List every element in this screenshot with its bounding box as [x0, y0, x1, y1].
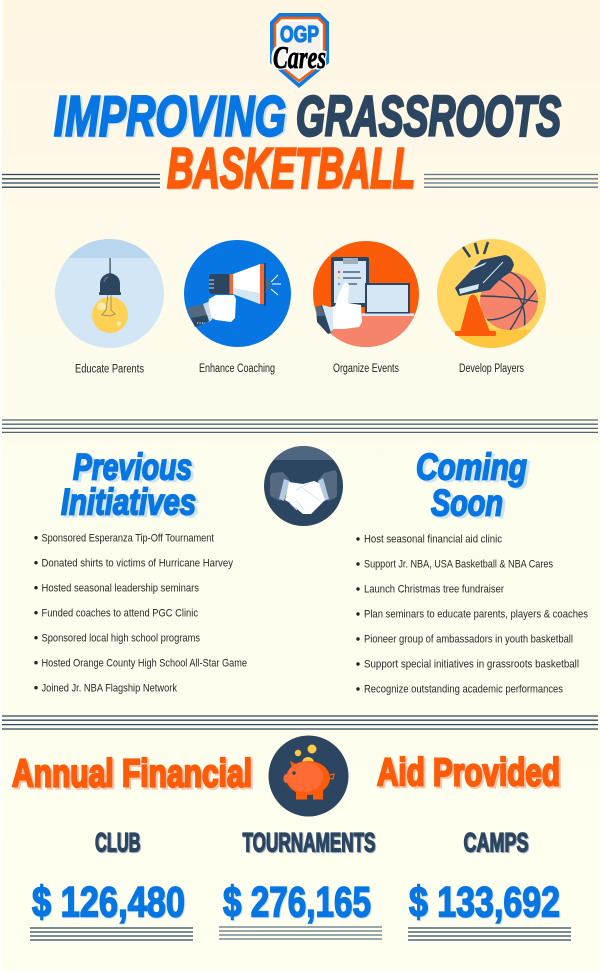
label: Enhance Coaching: Enhance Coaching: [199, 363, 275, 375]
title: Basketball: BASKETBALL: [167, 136, 415, 200]
heading: Previous Initiatives: Previous: [73, 446, 192, 488]
icon: light bulb: [55, 239, 164, 348]
icon: whistle, cone and basketball: [435, 239, 550, 350]
heading: Previous Initiatives: [61, 446, 196, 522]
icon: piggy bank: [268, 736, 348, 816]
stat: club: [32, 828, 185, 926]
heading: Coming Soon: Soon: [431, 482, 503, 524]
list: coming soon: Support special initiatives in grassroots basketball: [364, 658, 579, 670]
icon: megaphone: [184, 240, 291, 347]
list: previous initiatives: Hosted seasonal leadership seminars: [42, 582, 199, 594]
title: Improving Grassroots: IMPROVING: [54, 84, 286, 148]
logo: OGP Cares shield: [270, 13, 329, 88]
panel: goals: [50, 235, 550, 376]
logo: OGP Cares shield: OGP: [280, 21, 319, 47]
list: previous initiatives: Joined Jr. NBA Flagship Network: [42, 682, 177, 694]
list: previous initiatives: Sponsored local high school programs: [42, 632, 200, 644]
list: previous initiatives: Donated shirts to victims of Hurricane Harvey: [42, 558, 233, 570]
title: Improving Grassroots: [54, 84, 561, 148]
stat: camps: CAMPS: [464, 828, 528, 858]
label: Educate Parents: Educate Parents: [75, 364, 144, 376]
heading: Coming Soon: [416, 446, 527, 524]
stat: tournaments: [223, 828, 376, 926]
list: coming soon: [356, 534, 588, 696]
icon: handshake: [264, 446, 343, 526]
list: previous initiatives: Sponsored Esperanza Tip-Off Tournament: [42, 532, 214, 544]
label: Develop Players: Develop Players: [459, 363, 524, 375]
list: coming soon: Recognize outstanding academic performances: [364, 684, 563, 696]
stat: tournaments: TOURNAMENTS: [242, 828, 376, 858]
icon: clipboard and laptop: [313, 241, 419, 347]
list: coming soon: Host seasonal financial aid clinic: [364, 534, 502, 546]
list: previous initiatives: Hosted Orange County High School All-Star Game: [42, 658, 247, 670]
label: Organize Events: Organize Events: [333, 363, 399, 375]
list: coming soon: Launch Christmas tree fundraiser: [364, 584, 504, 596]
heading: Coming Soon: Coming: [416, 446, 527, 488]
list: coming soon: Support Jr. NBA, USA Basketball & NBA Cares: [364, 558, 553, 570]
logo: OGP Cares shield: Cares: [273, 39, 326, 75]
stat: club: CLUB: [95, 828, 140, 858]
stat: tournaments: $ 276,165: [223, 878, 371, 926]
stat: club: $ 126,480: [32, 878, 185, 926]
stat: camps: $ 133,692: [409, 878, 560, 926]
list: previous initiatives: [34, 532, 247, 694]
list: previous initiatives: Funded coaches to attend PGC Clinic: [42, 608, 198, 620]
stat: camps: [409, 828, 560, 926]
heading: Previous Initiatives: Initiatives: [61, 482, 196, 522]
heading: Annual Financial: Annual Financial: [12, 752, 252, 796]
